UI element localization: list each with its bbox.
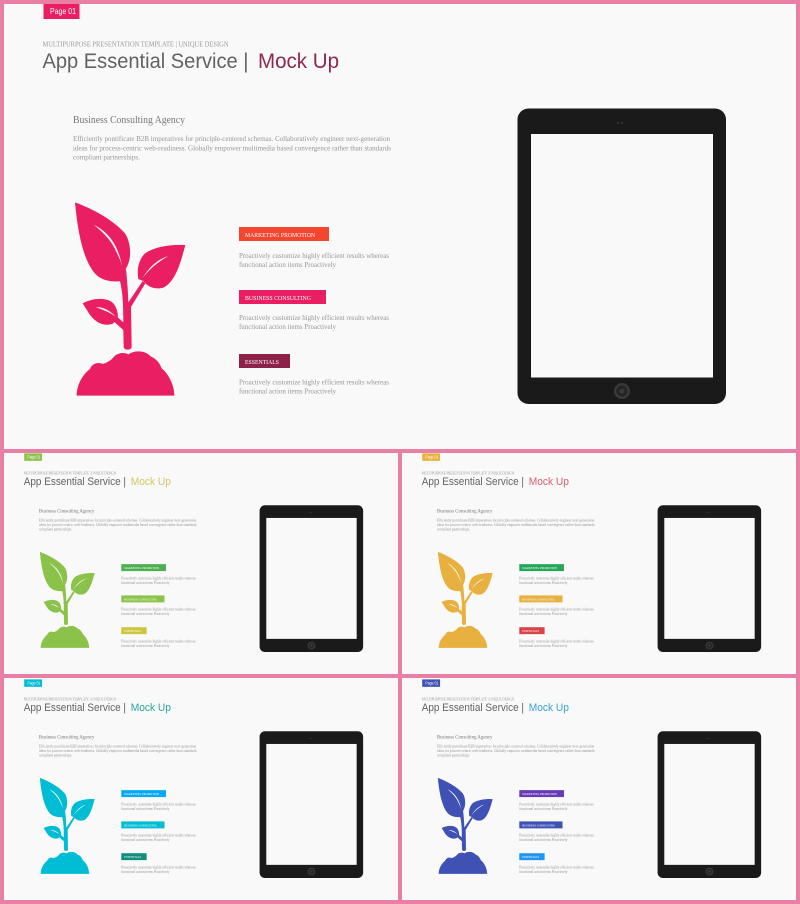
page tab [44, 4, 80, 19]
intro paragraph: Efficiently pontificate B2B imperatives for principle-centered schemas. Collaboratively engineer next-generation [39, 744, 196, 748]
intro paragraph: compliant partnerships. [39, 754, 72, 758]
intro paragraph [73, 134, 391, 162]
text: marketing promotion: functional action items Proactively [519, 581, 568, 585]
label: marketing promotion: MARKETING PROMOTION [522, 792, 558, 796]
page tab: Page 01 [425, 454, 439, 459]
text: business consulting [519, 833, 594, 842]
intro paragraph: ideas for process-centric web-readiness. Globally empower multimedia based convergence rather than standards [39, 749, 197, 753]
label: essentials [121, 627, 147, 634]
label: marketing promotion [121, 790, 166, 797]
page tab: Page 01 [27, 680, 41, 685]
tablet mockup [518, 108, 726, 404]
label: essentials: ESSENTIALS [245, 359, 279, 366]
label: business consulting: BUSINESS CONSULTING [124, 823, 158, 827]
tablet mockup [658, 731, 761, 878]
panel: indigo slide [422, 679, 761, 878]
subtitle: MULTIPURPOSE PRESENTATION TEMPLATE | UNIQUE DESIGN [422, 471, 514, 475]
label: marketing promotion: MARKETING PROMOTION [124, 566, 160, 570]
title: App Essential Service | [24, 702, 126, 714]
intro paragraph: compliant partnerships. [437, 528, 470, 532]
title: Mock Up [131, 702, 171, 714]
text: essentials: functional action items Proactively [239, 386, 336, 396]
page tab: Page 01 [50, 6, 76, 16]
panel: pink slide [42, 4, 726, 404]
intro paragraph: ideas for process-centric web-readiness. Globally empower multimedia based convergence rather than standards [437, 523, 595, 527]
text: business consulting: Proactively customize highly efficient results whereas [121, 833, 196, 837]
text: business consulting: Proactively customize highly efficient results whereas [121, 607, 196, 611]
intro paragraph: Efficiently pontificate B2B imperatives for principle-centered schemas. Collaboratively engineer next-generation [39, 518, 196, 522]
text: business consulting [239, 313, 389, 331]
label: marketing promotion [519, 564, 564, 571]
text: marketing promotion: Proactively customize highly efficient results whereas [519, 577, 594, 581]
icon: sprout [40, 778, 95, 874]
label: business consulting [121, 595, 164, 602]
label: marketing promotion: MARKETING PROMOTION [522, 566, 558, 570]
text: essentials [519, 639, 594, 648]
page tab: Page 01 [27, 454, 41, 459]
text: essentials: Proactively customize highly efficient results whereas [519, 639, 594, 643]
heading: Business Consulting Agency [39, 734, 95, 740]
text: essentials: Proactively customize highly efficient results whereas [239, 378, 389, 386]
title: App Essential Service | [24, 476, 126, 488]
text: business consulting: Proactively customize highly efficient results whereas [519, 607, 594, 611]
text: essentials: Proactively customize highly efficient results whereas [121, 639, 196, 643]
label: business consulting: BUSINESS CONSULTING [245, 295, 311, 302]
label: essentials [519, 627, 545, 634]
tablet mockup [658, 505, 761, 652]
text: marketing promotion: Proactively customize highly efficient results whereas [239, 251, 389, 260]
intro paragraph: Efficiently pontificate B2B imperatives for principle-centered schemas. Collaboratively engineer next-generation [73, 134, 390, 143]
label: essentials: ESSENTIALS [124, 855, 141, 859]
label: business consulting: BUSINESS CONSULTING [522, 823, 556, 827]
text: marketing promotion [239, 251, 389, 269]
text: marketing promotion: Proactively customize highly efficient results whereas [121, 803, 196, 807]
text: essentials [121, 865, 196, 874]
intro paragraph: compliant partnerships. [437, 754, 470, 758]
text: business consulting: functional action items Proactively [519, 612, 568, 616]
text: business consulting: Proactively customize highly efficient results whereas [519, 833, 594, 837]
title: App Essential Service | [42, 49, 248, 73]
intro paragraph [437, 518, 595, 532]
intro paragraph [39, 744, 197, 758]
text: business consulting: functional action items Proactively [239, 322, 336, 331]
icon: sprout [40, 552, 95, 648]
title: Mock Up [131, 476, 171, 488]
intro paragraph: Efficiently pontificate B2B imperatives for principle-centered schemas. Collaboratively engineer next-generation [437, 744, 594, 748]
label: essentials [121, 853, 147, 860]
page tab [24, 679, 42, 687]
label: marketing promotion: MARKETING PROMOTION [245, 232, 315, 239]
label: business consulting [121, 821, 164, 828]
label: essentials: ESSENTIALS [124, 629, 141, 633]
icon: sprout [438, 552, 493, 648]
label: marketing promotion [519, 790, 564, 797]
intro paragraph: compliant partnerships. [73, 152, 140, 162]
intro paragraph: compliant partnerships. [39, 528, 72, 532]
panel: cyan slide [24, 679, 363, 878]
text: marketing promotion [121, 803, 196, 811]
text: marketing promotion: functional action items Proactively [121, 581, 170, 585]
icon: sprout [75, 202, 185, 396]
heading: Business Consulting Agency [39, 508, 95, 514]
label: essentials [519, 853, 545, 860]
text: essentials: functional action items Proactively [519, 644, 568, 648]
page tab [24, 453, 42, 461]
text: marketing promotion [519, 803, 594, 811]
label: business consulting [519, 595, 562, 602]
text: marketing promotion: Proactively customize highly efficient results whereas [121, 577, 196, 581]
page tab [422, 679, 440, 687]
text: marketing promotion: functional action items Proactively [519, 807, 568, 811]
text: marketing promotion [121, 577, 196, 585]
intro paragraph: ideas for process-centric web-readiness. Globally empower multimedia based convergence rather than standards [39, 523, 197, 527]
text: business consulting: functional action items Proactively [121, 838, 170, 842]
text: essentials: Proactively customize highly efficient results whereas [519, 865, 594, 869]
label: business consulting [239, 290, 326, 304]
text: essentials: functional action items Proactively [121, 644, 170, 648]
intro paragraph [437, 744, 595, 758]
intro paragraph: Efficiently pontificate B2B imperatives for principle-centered schemas. Collaboratively engineer next-generation [437, 518, 594, 522]
label: business consulting [519, 821, 562, 828]
intro paragraph [39, 518, 197, 532]
icon: sprout [438, 778, 493, 874]
label: essentials [239, 354, 290, 368]
page tab: Page 01 [425, 680, 439, 685]
title: App Essential Service | [422, 702, 524, 714]
text: marketing promotion: functional action items Proactively [239, 260, 336, 269]
tablet mockup [260, 731, 363, 878]
text: business consulting [121, 833, 196, 842]
title: App Essential Service | [422, 476, 524, 488]
text: marketing promotion: Proactively customize highly efficient results whereas [519, 803, 594, 807]
intro paragraph: ideas for process-centric web-readiness. Globally empower multimedia based convergence rather than standards [73, 144, 391, 152]
text: essentials [121, 639, 196, 648]
text: business consulting: functional action items Proactively [121, 612, 170, 616]
label: business consulting: BUSINESS CONSULTING [124, 597, 158, 601]
text: business consulting [121, 607, 196, 616]
heading: Business Consulting Agency [437, 508, 493, 514]
text: business consulting: Proactively customize highly efficient results whereas [239, 313, 389, 322]
subtitle: MULTIPURPOSE PRESENTATION TEMPLATE | UNIQUE DESIGN [24, 697, 116, 701]
label: business consulting: BUSINESS CONSULTING [522, 597, 556, 601]
panel: green slide [24, 453, 363, 652]
page tab [422, 453, 440, 461]
text: essentials [519, 865, 594, 874]
tablet mockup [260, 505, 363, 652]
heading: Business Consulting Agency [73, 115, 186, 126]
text: essentials: Proactively customize highly efficient results whereas [121, 865, 196, 869]
text: essentials: functional action items Proactively [519, 870, 568, 874]
subtitle: MULTIPURPOSE PRESENTATION TEMPLATE | UNIQUE DESIGN [422, 697, 514, 701]
label: marketing promotion [121, 564, 166, 571]
subtitle: MULTIPURPOSE PRESENTATION TEMPLATE | UNIQUE DESIGN [24, 471, 116, 475]
label: marketing promotion: MARKETING PROMOTION [124, 792, 160, 796]
text: marketing promotion: functional action items Proactively [121, 807, 170, 811]
title: Mock Up [258, 49, 339, 73]
label: marketing promotion [239, 227, 329, 241]
panel: amber slide [422, 453, 761, 652]
title: Mock Up [529, 702, 569, 714]
text: business consulting: functional action items Proactively [519, 838, 568, 842]
subtitle: MULTIPURPOSE PRESENTATION TEMPLATE | UNIQUE DESIGN [42, 40, 229, 48]
text: essentials: functional action items Proactively [121, 870, 170, 874]
label: essentials: ESSENTIALS [522, 855, 539, 859]
text: business consulting [519, 607, 594, 616]
text: essentials [239, 378, 389, 396]
title: Mock Up [529, 476, 569, 488]
heading: Business Consulting Agency [437, 734, 493, 740]
label: essentials: ESSENTIALS [522, 629, 539, 633]
text: marketing promotion [519, 577, 594, 585]
intro paragraph: ideas for process-centric web-readiness. Globally empower multimedia based convergence rather than standards [437, 749, 595, 753]
